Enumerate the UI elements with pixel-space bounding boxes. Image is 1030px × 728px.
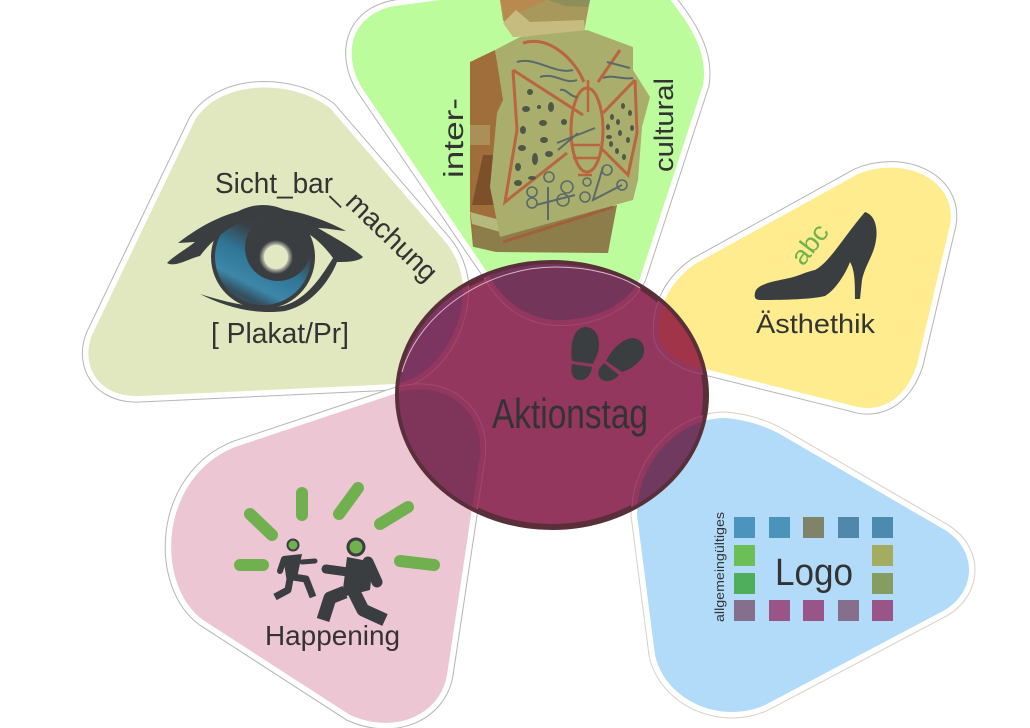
text: _machung: _machung [328, 174, 444, 288]
text: allgemeingültiges: allgemeingültiges [712, 511, 727, 622]
petal: Logo [637, 418, 969, 712]
photo: figure with butterfly vest [470, 0, 650, 253]
logo frame: coloured squares [734, 517, 893, 621]
icon: running figures [275, 539, 385, 620]
icon: eye [167, 205, 363, 312]
petal: inter-cultural [352, 0, 704, 320]
text: Happening: Happening [265, 620, 400, 651]
text: abc: abc [784, 218, 835, 271]
petal: Ästhethik [659, 168, 951, 408]
icon: footprints [571, 327, 644, 381]
text: Logo: Logo [775, 552, 853, 594]
centre circle: Aktionstag [395, 260, 709, 530]
text: Sicht_bar: Sicht_bar [215, 168, 333, 200]
text: Aktionstag: Aktionstag [492, 390, 648, 437]
petal: Sicht_bar_machung [88, 87, 463, 396]
text: Plakat/Pr: [ Plakat/Pr] [211, 318, 349, 350]
overlapping petal tips [399, 264, 704, 510]
text: inter-: inter- [438, 98, 469, 178]
text: cultural: cultural [649, 78, 679, 172]
icon: motion dashes [240, 488, 434, 565]
icon: high heel shoe [755, 212, 877, 300]
highlight: rim arc [402, 267, 640, 372]
text: Ästhethik: Ästhethik [756, 309, 876, 339]
petal: Happening [171, 389, 480, 723]
